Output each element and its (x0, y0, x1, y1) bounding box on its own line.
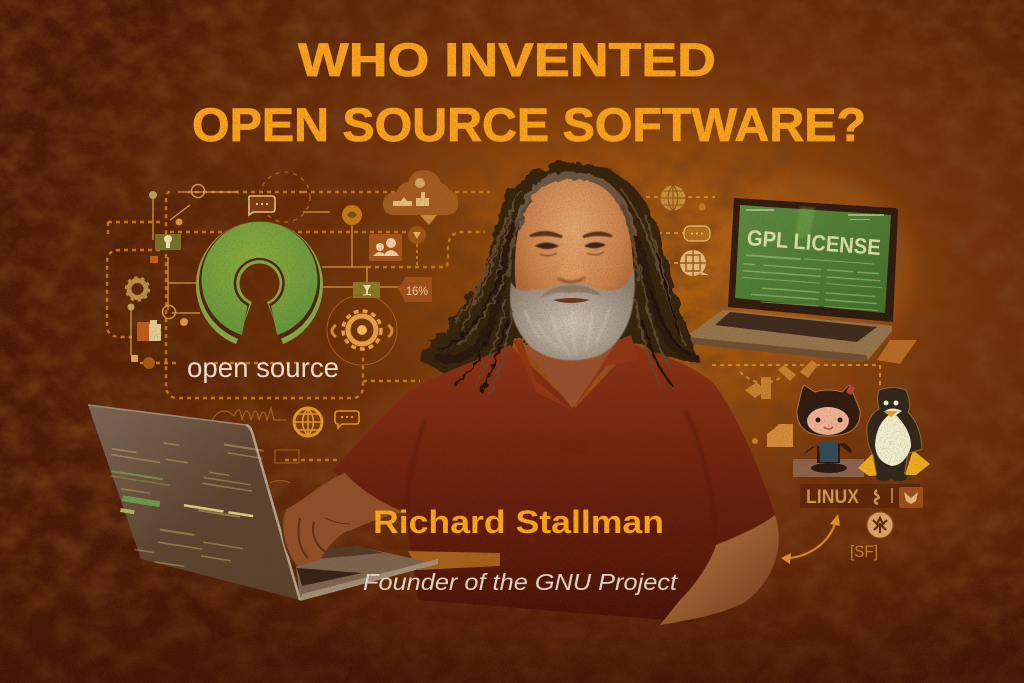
icon: large gear (327, 295, 397, 365)
icon: globe top right (660, 185, 686, 211)
screen heading: GPL LICENSE: GPL LICENSE (746, 225, 882, 260)
laptop base (685, 310, 892, 362)
title (192, 33, 866, 151)
tux body (867, 388, 922, 477)
icon: fox badge (899, 487, 923, 508)
laptop: code screen (88, 405, 500, 601)
icon: globe bubble (680, 250, 709, 276)
laptop lid (728, 198, 898, 322)
right arm (660, 515, 779, 625)
feet wings (858, 450, 930, 476)
hair strands (438, 175, 695, 395)
shirt (333, 345, 775, 622)
pedestal (793, 459, 864, 477)
neck (522, 345, 630, 408)
tux face (885, 408, 902, 418)
label: open source: open source (187, 352, 339, 383)
laptop lid (88, 405, 300, 600)
octocat face (807, 407, 849, 435)
icon: people box (369, 234, 402, 261)
icons: blocks and house (745, 360, 818, 447)
speaker role: Founder of the GNU Project (363, 569, 679, 595)
logo: open source (187, 222, 339, 383)
octocat head (797, 385, 860, 436)
nose (558, 248, 585, 282)
label row: LINUX (800, 484, 923, 508)
beard (510, 266, 635, 360)
icon: chat bubble right (684, 226, 710, 241)
hair back (417, 163, 698, 391)
label row: LINUX: LINUX (806, 487, 859, 508)
portrait: Richard Stallman (333, 163, 779, 625)
arrow: curved double head (781, 514, 840, 564)
icon: folder (137, 320, 161, 341)
icon: round badge (867, 512, 893, 538)
icon: olive box (353, 282, 380, 298)
icon: heart node under cloud (408, 226, 426, 267)
laptop screen (735, 205, 891, 313)
laptop base (296, 546, 438, 601)
laptop: GPL license (685, 175, 917, 365)
collar (513, 335, 638, 410)
tux belly (875, 412, 911, 466)
icon: globe bottom (294, 408, 322, 436)
network icons: right of portrait (638, 185, 880, 412)
keyboard (297, 568, 362, 586)
icon: percent tag: 16% (406, 284, 428, 298)
icon: globe node top (342, 205, 362, 225)
code lines (95, 426, 264, 577)
network diagram: left tech circuit (107, 170, 490, 483)
table notebook (408, 551, 500, 570)
title: WHO INVENTED (298, 33, 716, 86)
mascot: octocat (793, 385, 864, 477)
icon: percent tag (398, 277, 432, 302)
icon: chat bubble bottom (335, 411, 359, 428)
eyes and brows (530, 232, 612, 256)
laptop pad (877, 340, 917, 364)
mascot: tux penguin (858, 388, 930, 481)
icon: lock box (155, 234, 181, 250)
icon: cloud (383, 170, 458, 225)
label: SF: [SF] (850, 542, 878, 561)
squiggle (212, 408, 286, 420)
octocat body (804, 443, 852, 463)
face (515, 178, 633, 340)
speaker name: Richard Stallman (373, 504, 664, 540)
icon: gear left (126, 278, 149, 300)
icon: chat bubble top (249, 196, 275, 215)
screen text lines (741, 254, 884, 311)
icon: globe and nodes (128, 172, 310, 369)
title: OPEN SOURCE SOFTWARE? (192, 98, 866, 151)
left arm and hand (282, 473, 405, 566)
